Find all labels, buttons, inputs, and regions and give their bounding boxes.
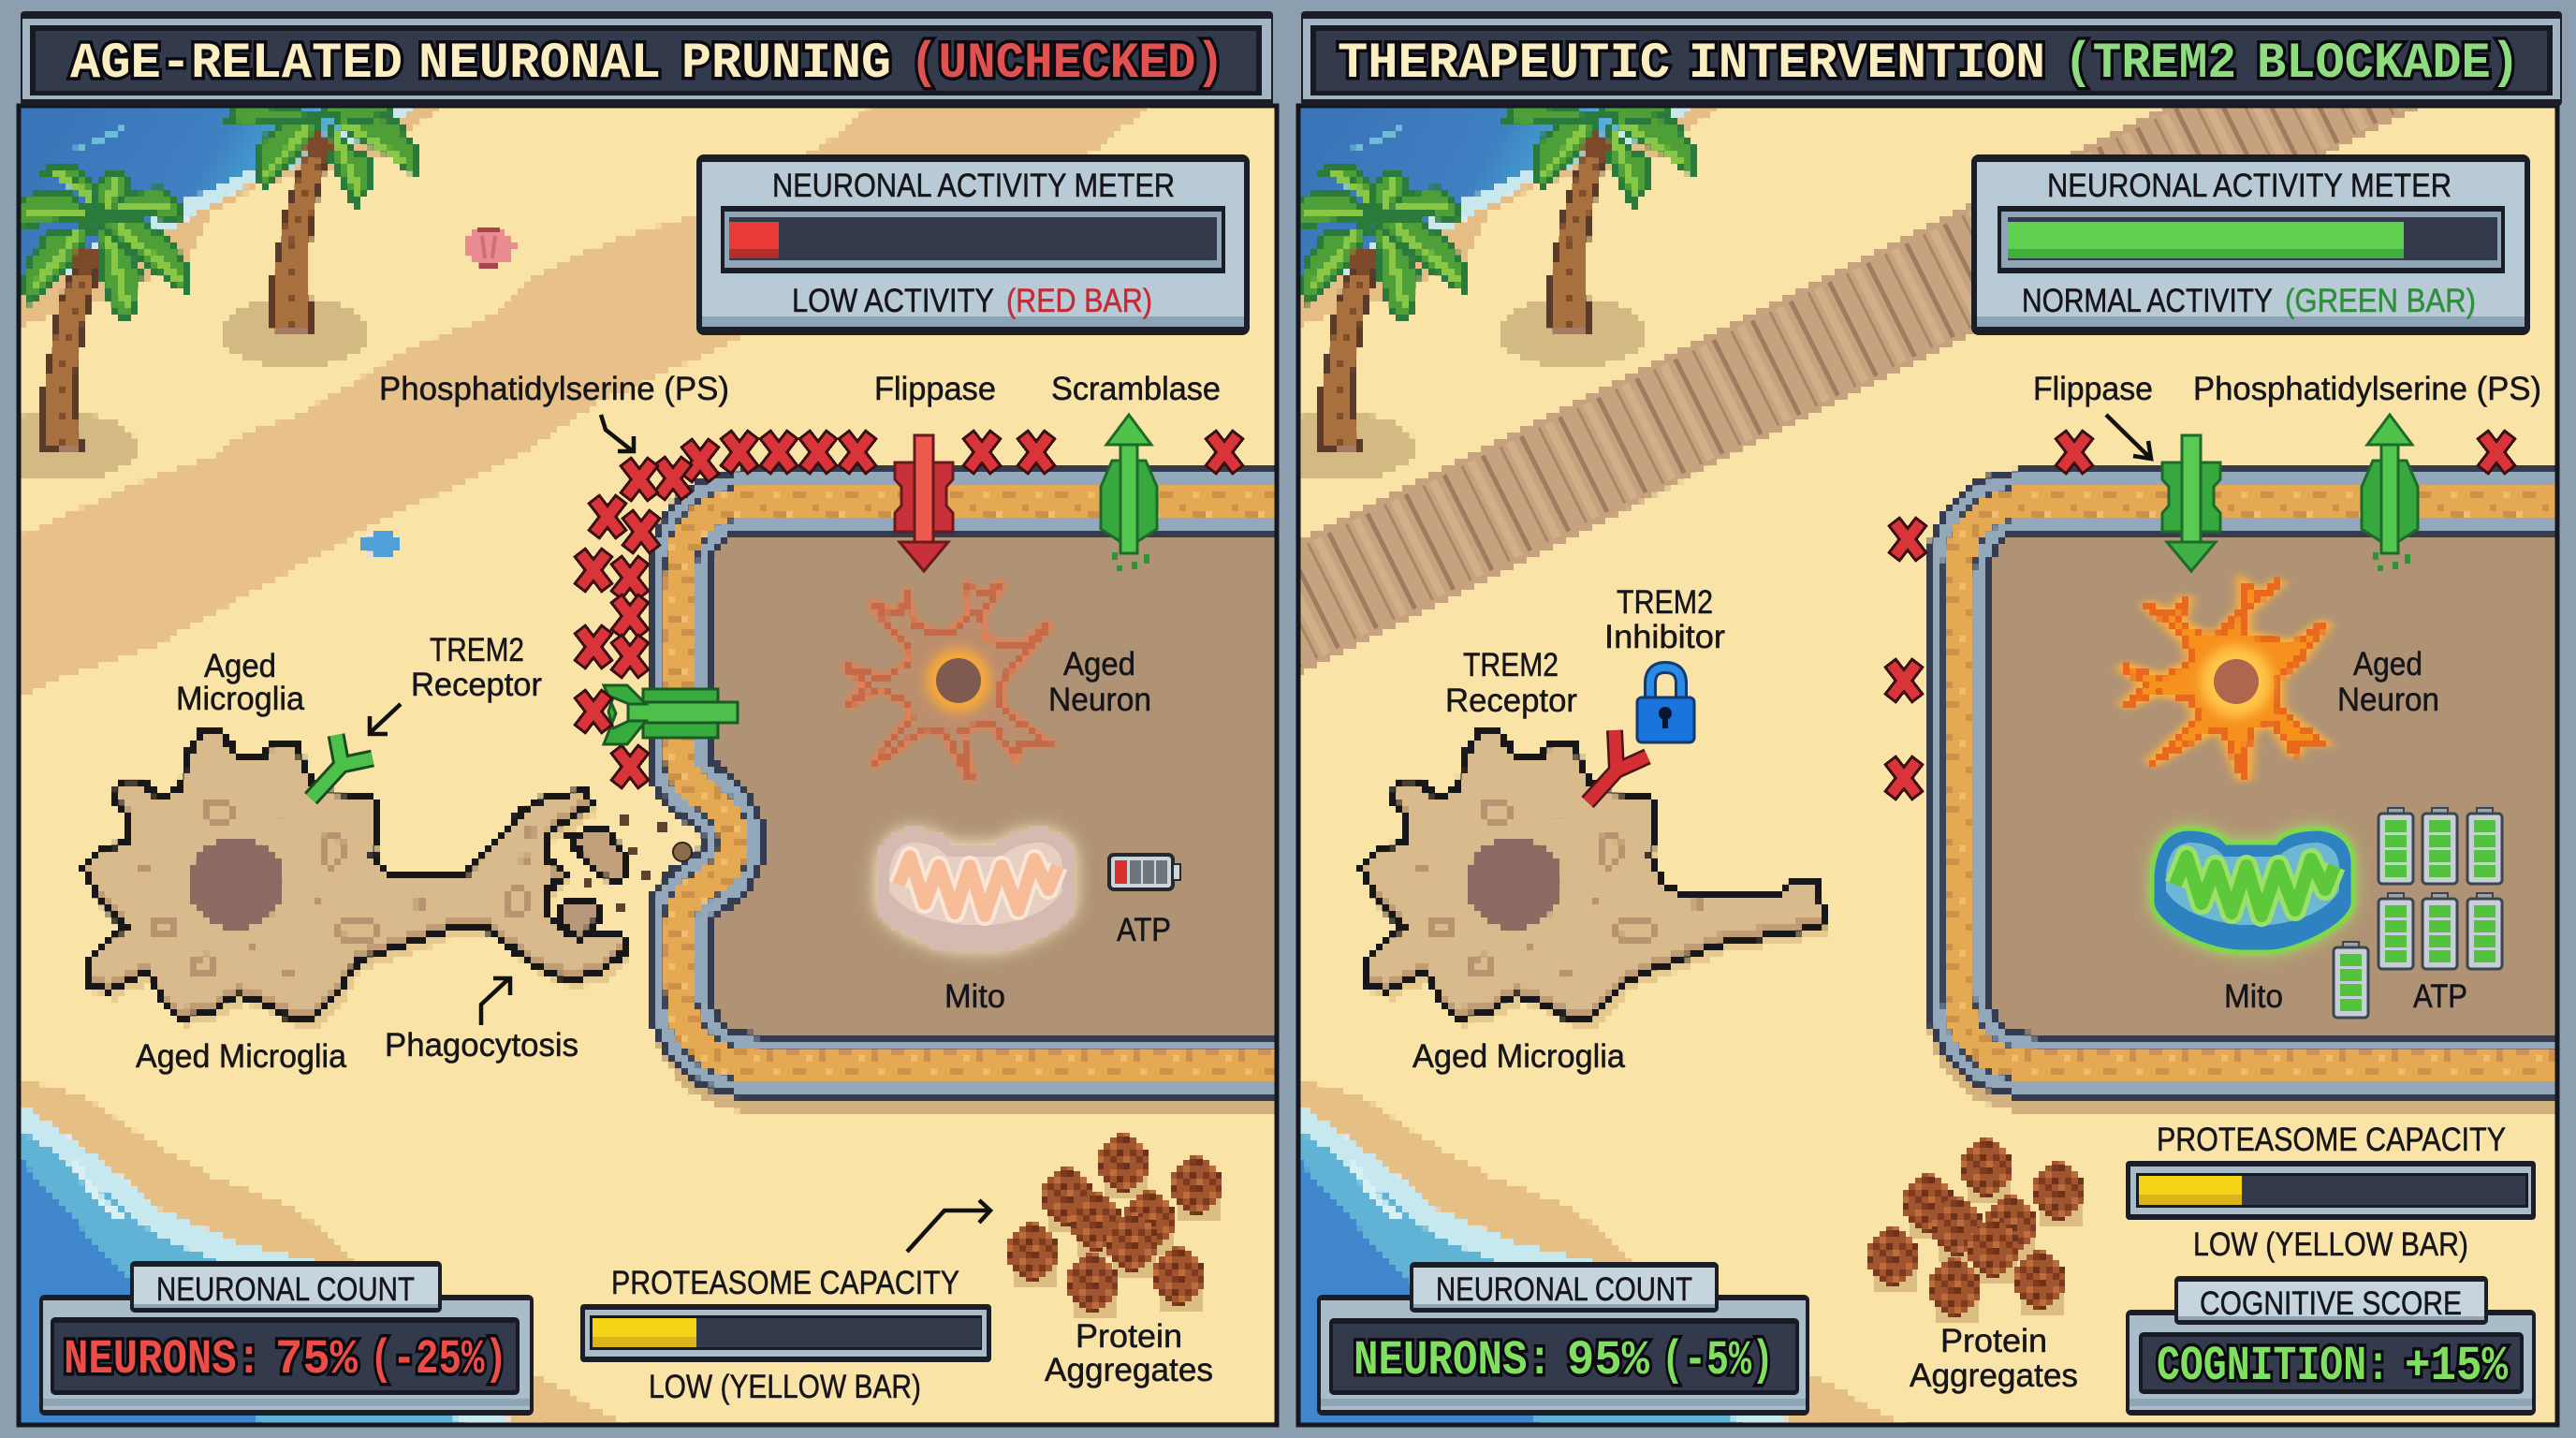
label: flippase: Flippase xyxy=(2033,371,2153,407)
icon: neuron bright with glow xyxy=(2121,580,2326,781)
meter bar green xyxy=(1998,206,2505,273)
count tab: NEURONAL COUNT xyxy=(1436,1271,1692,1308)
beach scene left xyxy=(0,100,1310,1428)
label: phosphatidylserine: Phosphatidylserine (PS) xyxy=(2193,371,2541,407)
title text: THERAPEUTIC xyxy=(1338,36,1670,93)
panel outline right xyxy=(1298,106,2557,1425)
count value: (-25%) xyxy=(370,1332,507,1387)
label: TREM2 receptor: TREM2 xyxy=(430,632,524,668)
aged microglia without phagocytosis xyxy=(1361,720,1831,1027)
icon: TREM2 receptor docked on membrane xyxy=(604,685,738,744)
boardwalk planks xyxy=(1297,106,2411,668)
activity meter left xyxy=(696,154,1250,335)
icon: second green channel xyxy=(2362,415,2418,571)
proteasome caption: LOW (YELLOW BAR) xyxy=(2193,1226,2468,1263)
label: aged neuron: Neuron xyxy=(2337,682,2439,718)
aged microglia with phagocytic process xyxy=(83,720,631,1027)
count value: NEURONS: xyxy=(1354,1333,1552,1388)
label: TREM2 receptor: Receptor xyxy=(1445,682,1577,719)
pixelated scene layer right xyxy=(1257,100,2576,1428)
neuronal count panel right xyxy=(1317,1262,1809,1416)
proteasome heading: PROTEASOME CAPACITY xyxy=(611,1265,959,1301)
phosphatidylserine markers left xyxy=(584,440,1234,779)
count value: (-5%) xyxy=(1661,1333,1774,1388)
protein aggregates left xyxy=(1007,1133,1222,1318)
label: mito: Mito xyxy=(2224,978,2283,1015)
phosphatidylserine markers right xyxy=(1895,440,2506,790)
label: mito: Mito xyxy=(944,978,1005,1015)
label: aged microglia top: Microglia xyxy=(176,681,305,717)
icon: mitochondrion healthy xyxy=(2152,829,2353,952)
icon: blue pebble xyxy=(362,532,400,556)
cognitive score panel xyxy=(2126,1276,2536,1416)
meter caption: NORMAL ACTIVITY xyxy=(2022,283,2273,319)
label: protein aggregates: Aggregates xyxy=(1045,1352,1213,1388)
title text: INTERVENTION xyxy=(1689,36,2045,93)
label: aged microglia top: Aged xyxy=(204,648,276,684)
arrow right xyxy=(2106,415,2151,459)
score value: +15% xyxy=(2405,1339,2509,1394)
label: protein aggregates: Aggregates xyxy=(1910,1357,2078,1394)
labels left xyxy=(136,371,1221,1388)
icon: ATP batteries xyxy=(2334,808,2502,1018)
label: phagocytosis: Phagocytosis xyxy=(385,1027,578,1064)
label: flippase: Flippase xyxy=(874,371,996,407)
label: TREM2 receptor: Receptor xyxy=(411,667,542,703)
meter bar red xyxy=(721,206,1225,273)
proteasome caption: LOW (YELLOW BAR) xyxy=(649,1369,921,1405)
meter heading: NEURONAL ACTIVITY METER xyxy=(772,168,1175,204)
label: ATP: ATP xyxy=(1117,912,1171,948)
count value: 75% xyxy=(275,1332,359,1387)
neuron membrane right xyxy=(1958,501,2576,1081)
count tab xyxy=(1410,1262,1719,1313)
icon: blue padlock xyxy=(1637,668,1694,742)
icon: neuron dim with glow xyxy=(844,582,1050,781)
title bar left xyxy=(21,11,1273,106)
label: aged neuron: Aged xyxy=(1063,646,1135,682)
shell rims xyxy=(477,227,500,269)
meter caption: (GREEN BAR) xyxy=(2285,283,2476,319)
beach scene right xyxy=(1257,100,2576,1428)
panel outline left xyxy=(19,106,1277,1425)
count value: 95% xyxy=(1567,1333,1650,1388)
label: aged neuron: Aged xyxy=(2353,646,2422,682)
meter caption: LOW ACTIVITY xyxy=(792,283,994,319)
label: TREM2 inhibitor: Inhibitor xyxy=(1604,619,1725,655)
label: aged microglia: Aged Microglia xyxy=(1412,1038,1626,1075)
label: protein aggregates: Protein xyxy=(1940,1323,2047,1359)
title text: NEURONAL xyxy=(418,36,661,93)
proteasome heading: PROTEASOME CAPACITY xyxy=(2157,1122,2506,1158)
label: ATP: ATP xyxy=(2413,978,2467,1015)
proteasome bar xyxy=(580,1304,991,1362)
debris fragments xyxy=(584,814,692,912)
title accent right: (TREM2 xyxy=(2064,36,2236,93)
label: scramblase: Scramblase xyxy=(1051,371,1221,407)
shell ridges xyxy=(482,236,495,258)
icon: pink shell xyxy=(463,228,516,267)
icon: flippase red channel xyxy=(895,435,953,571)
protein aggregates right xyxy=(1867,1137,2084,1323)
proteasome capacity right xyxy=(2126,1122,2536,1263)
proteasome bar xyxy=(2126,1161,2536,1220)
icon: scramblase green channel xyxy=(1101,415,1157,571)
activity meter right xyxy=(1971,154,2530,335)
marker held by receptor xyxy=(584,699,603,724)
arrows left xyxy=(370,415,990,1252)
neuronal count panel left xyxy=(39,1261,534,1416)
label: aged neuron: Neuron xyxy=(1048,682,1151,718)
icon: mitochondrion pale xyxy=(875,829,1076,952)
title text: PRUNING xyxy=(681,36,891,93)
count tab: NEURONAL COUNT xyxy=(156,1271,415,1308)
label: TREM2 inhibitor: TREM2 xyxy=(1617,584,1713,621)
meter caption: (RED BAR) xyxy=(1006,283,1152,319)
label: phosphatidylserine: Phosphatidylserine (PS) xyxy=(379,371,729,407)
label: protein aggregates: Protein xyxy=(1076,1318,1182,1355)
count value: NEURONS: xyxy=(64,1332,261,1387)
score value: COGNITION: xyxy=(2157,1339,2390,1394)
icon: flippase green channel xyxy=(2162,435,2220,571)
neuron membrane left xyxy=(680,501,1310,1081)
label: aged microglia bottom: Aged Microglia xyxy=(136,1038,347,1075)
panel: age-related neuronal pruning xyxy=(0,100,1310,1428)
title accent left: (UNCHECKED) xyxy=(910,36,1224,93)
score tab xyxy=(2174,1276,2488,1325)
meter heading: NEURONAL ACTIVITY METER xyxy=(2047,168,2452,204)
title bar right xyxy=(1301,11,2562,106)
icon: TREM2 receptor blocked red xyxy=(1588,730,1647,802)
title text: AGE-RELATED xyxy=(70,36,402,93)
score tab: COGNITIVE SCORE xyxy=(2200,1285,2462,1322)
boardwalk base xyxy=(1297,106,2423,676)
label: TREM2 receptor: TREM2 xyxy=(1463,647,1559,683)
labels right xyxy=(1412,371,2541,1394)
panel: therapeutic intervention xyxy=(1257,100,2576,1428)
icon: TREM2 receptor on microglia xyxy=(311,735,373,799)
title accent right: BLOCKADE) xyxy=(2257,36,2520,93)
proteasome capacity left xyxy=(580,1265,991,1405)
count tab xyxy=(130,1261,442,1313)
icon: low battery xyxy=(1109,855,1180,889)
pixelated scene layer left xyxy=(0,100,1310,1428)
